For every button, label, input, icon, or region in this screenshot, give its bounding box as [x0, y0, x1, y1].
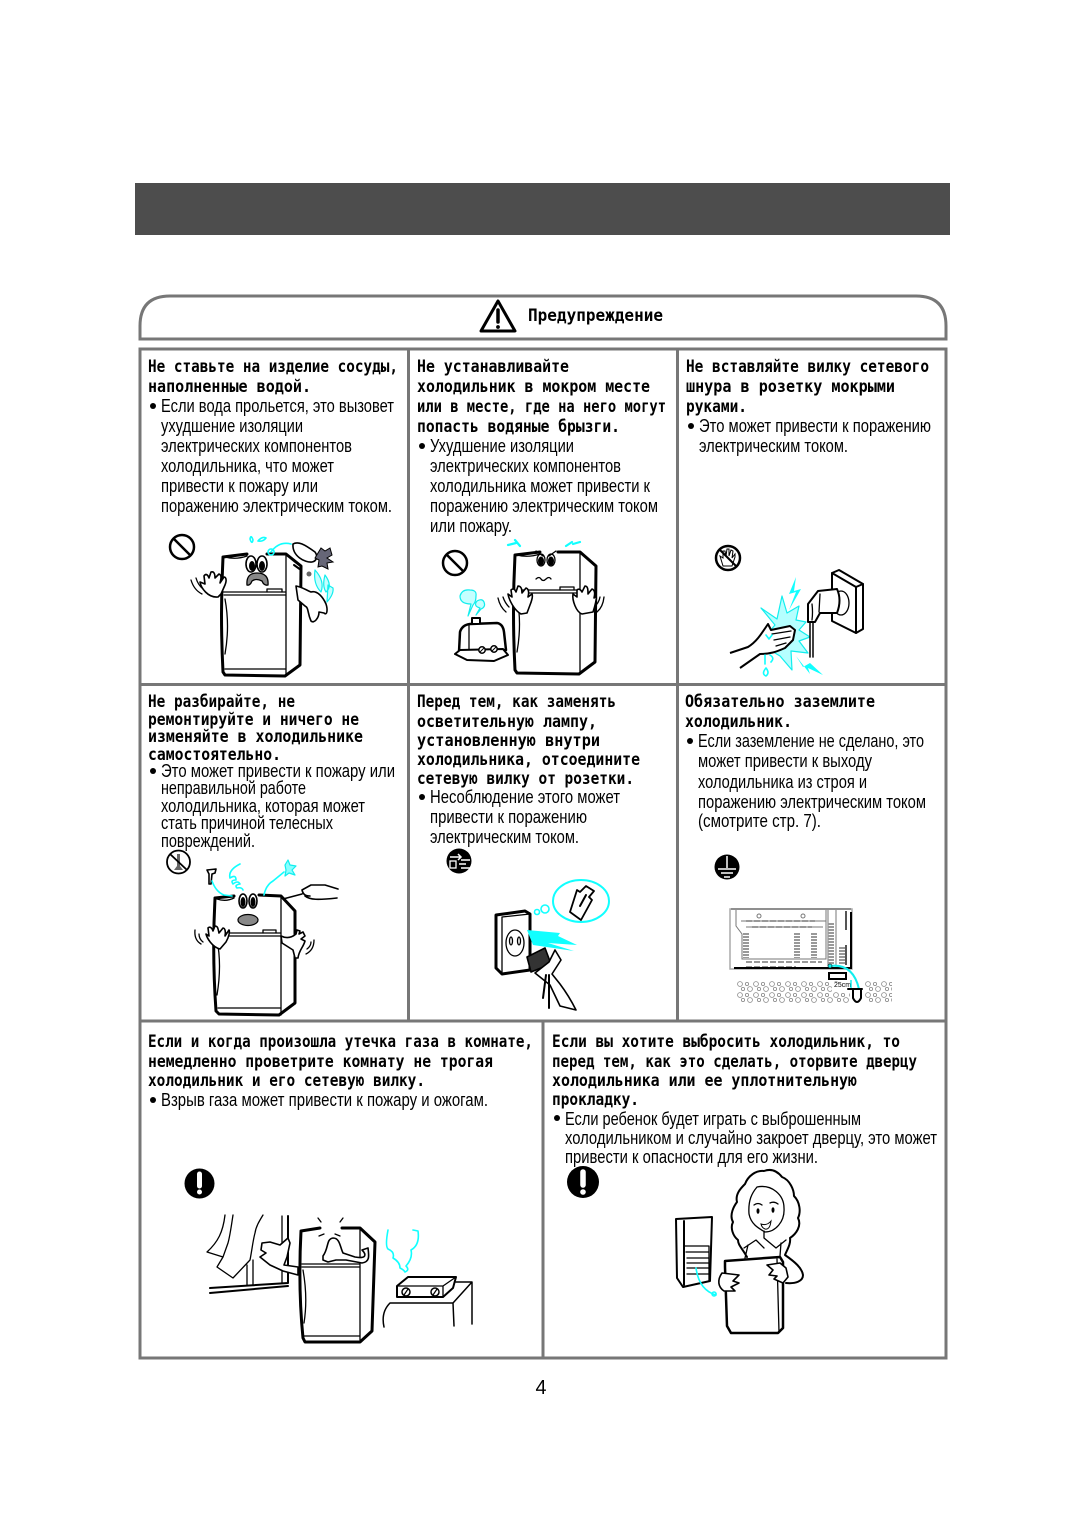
body text: холодильника, что может	[161, 456, 334, 476]
illustration: fridge with vase	[191, 537, 333, 676]
body text: холодильника из строя и	[698, 772, 867, 792]
body text: Взрыв газа может привести к пожару и ожогам.	[161, 1090, 488, 1110]
heading	[417, 692, 640, 789]
body text: холодильника может привести к	[430, 476, 650, 496]
illustration: back of fridge with ground wire	[730, 909, 892, 1003]
panel: discarding fridge	[552, 1032, 937, 1333]
heading: Не ставьте на изделие сосуды,	[148, 357, 398, 377]
body text: Если ребенок будет играть с выброшенным	[565, 1109, 861, 1129]
heading: изменяйте в холодильнике	[148, 727, 363, 747]
heading: холодильник и его сетевую вилку.	[148, 1071, 425, 1091]
heading: установленную внутри	[417, 731, 600, 751]
body text	[687, 731, 926, 831]
body text	[150, 396, 394, 516]
heading: Обязательно заземлите	[685, 692, 875, 712]
heading: ремонтируйте и ничего не	[148, 710, 359, 730]
heading: Если вы хотите выбросить холодильник, то	[552, 1032, 900, 1052]
icon: prohibited	[443, 551, 467, 575]
body text: (смотрите стр. 7).	[698, 811, 821, 831]
icon: ground	[714, 854, 740, 880]
body text	[419, 787, 620, 847]
body text: Это может привести к пожару или	[161, 761, 395, 781]
table frame	[140, 349, 946, 1358]
body text: может привести к выходу	[698, 751, 872, 771]
body text	[688, 416, 931, 456]
heading	[552, 1032, 917, 1110]
heading: шнура в розетку мокрыми	[686, 377, 895, 397]
illustration: socket, hand and bubble	[496, 880, 609, 1010]
heading: Если и когда произошла утечка газа в комнате,	[148, 1032, 533, 1052]
icon: no wet hands	[716, 546, 740, 570]
heading	[148, 1032, 533, 1091]
body text: электрическим током.	[430, 827, 579, 847]
warning heading: Предупреждение	[528, 306, 663, 326]
panel: water vessels	[148, 357, 398, 676]
body text: холодильника, которая может	[161, 796, 365, 816]
body text: ухудшение изоляции	[161, 416, 303, 436]
illustration: back of fridge with ground wire: 25cm	[834, 982, 851, 989]
heading: сетевую вилку от розетки.	[417, 769, 634, 789]
icon: unplug	[446, 848, 472, 874]
illustration: fridge, window and stove	[207, 1215, 472, 1342]
body text: Ухудшение изоляции	[430, 436, 574, 456]
panel: do not disassemble	[148, 692, 395, 1015]
body text	[419, 436, 658, 536]
heading: холодильник.	[685, 712, 792, 732]
panel: unplug before replacing lamp	[417, 692, 640, 1010]
icon: warning triangle	[481, 301, 515, 331]
heading: самостоятельно.	[148, 745, 281, 765]
body text: поражению электрическим током	[698, 792, 926, 812]
illustration: fridge and screwdriver	[195, 860, 338, 1015]
panel: grounding	[685, 692, 926, 1003]
heading: прокладку.	[552, 1090, 639, 1110]
illustration: woman with door and open fridge	[676, 1170, 803, 1333]
heading: Перед тем, как заменять	[417, 692, 616, 712]
body text: Это может привести к поражению	[699, 416, 931, 436]
heading: перед тем, как это сделать, оторвите дверцу	[552, 1052, 917, 1072]
heading: руками.	[686, 397, 747, 417]
heading	[417, 357, 666, 437]
heading: Не разбирайте, не	[148, 692, 295, 712]
body text: привести к пожару или	[161, 476, 318, 496]
body text: неправильной работе	[161, 778, 306, 798]
heading	[685, 692, 875, 732]
warning tab	[140, 296, 946, 339]
illustration: hand and plug shock	[730, 570, 863, 676]
heading: осветительную лампу,	[417, 712, 597, 732]
heading	[686, 357, 929, 417]
heading: немедленно проветрите комнату не трогая	[148, 1052, 493, 1072]
heading	[148, 357, 398, 397]
icon: mandatory	[184, 1168, 214, 1198]
body text: поражению электрическим током	[430, 496, 658, 516]
icon: no disassembly	[167, 850, 190, 874]
panel: gas leak	[148, 1032, 533, 1342]
body text	[554, 1109, 937, 1167]
heading: холодильника, отсоедините	[417, 750, 640, 770]
body text: электрических компонентов	[430, 456, 621, 476]
illustration: fridge and humidifier	[455, 540, 604, 674]
body text: привести к поражению	[430, 807, 587, 827]
body text	[150, 761, 395, 851]
body text: повреждений.	[161, 831, 255, 851]
page number: 4	[536, 1377, 546, 1399]
body text: поражению электрическим током.	[161, 496, 392, 516]
heading	[148, 692, 363, 765]
panel: wet location	[417, 357, 666, 674]
heading: наполненные водой.	[148, 377, 311, 397]
body text: электрическим током.	[699, 436, 848, 456]
body text: стать причиной телесных	[161, 813, 333, 833]
body text: Если вода прольется, это вызовет	[161, 396, 394, 416]
heading: попасть водяные брызги.	[417, 417, 620, 437]
heading: холодильника или ее уплотнительную	[552, 1071, 857, 1091]
body text: Несоблюдение этого может	[430, 787, 620, 807]
heading: холодильник в мокром месте	[417, 377, 650, 397]
heading: Не устанавливайте	[417, 357, 569, 377]
header bar	[135, 183, 950, 235]
body text: или пожару.	[430, 516, 512, 536]
body text: привести к опасности для его жизни.	[565, 1147, 818, 1167]
icon: mandatory	[567, 1166, 599, 1198]
body text: холодильником и случайно закроет дверцу, это может	[565, 1128, 937, 1148]
icon: prohibited	[170, 535, 194, 559]
body text: Если заземление не сделано, это	[698, 731, 924, 751]
panel: wet hands	[686, 357, 931, 676]
heading: Не вставляйте вилку сетевого	[686, 357, 929, 377]
heading: или в месте, где на него могут	[417, 397, 666, 417]
body text: электрических компонентов	[161, 436, 352, 456]
